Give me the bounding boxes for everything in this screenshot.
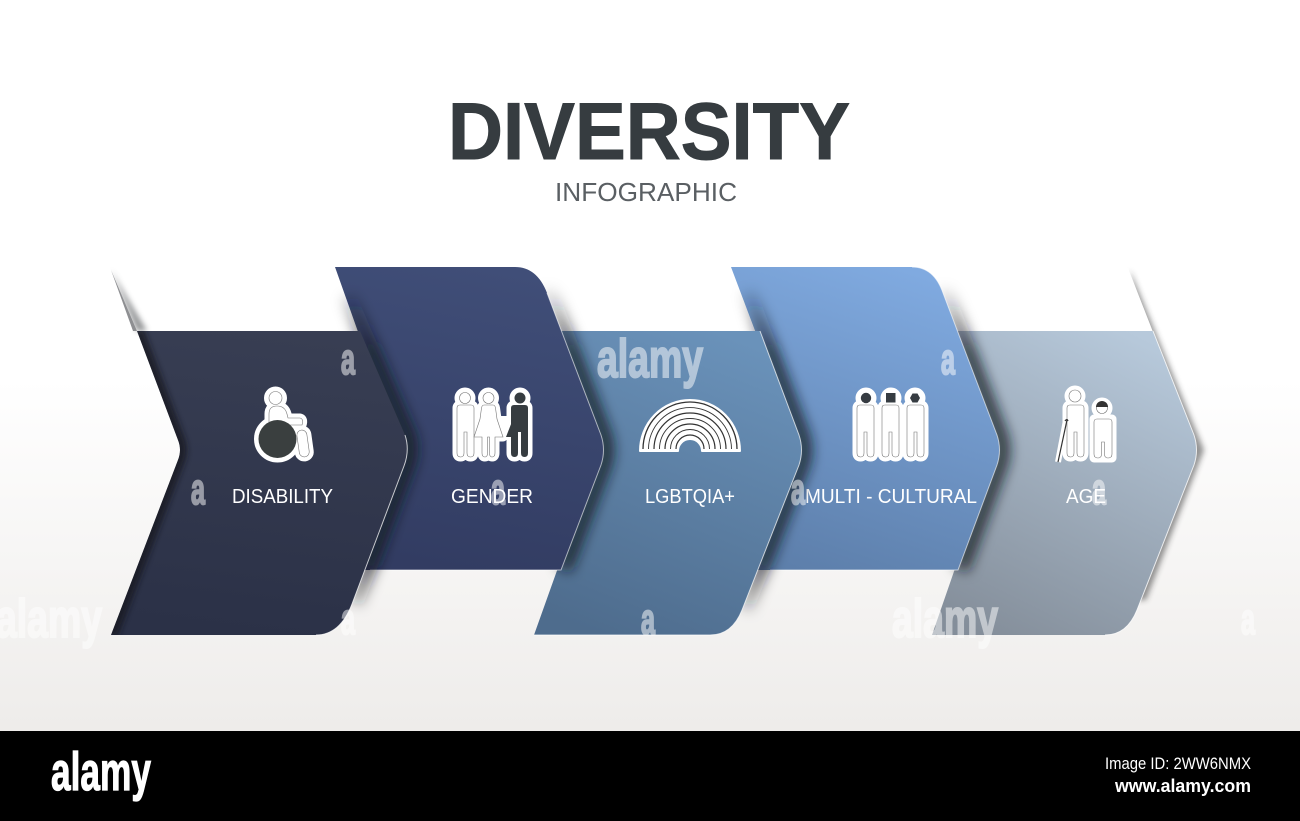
icon: age xyxy=(1058,390,1112,462)
icon: rainbow xyxy=(640,400,740,451)
footer bar xyxy=(0,731,1300,821)
label: multi-cultural: MULTI - CULTURAL xyxy=(805,486,977,508)
watermarks: a xyxy=(1092,465,1106,514)
image id: Image ID: 2WW6NMX xyxy=(1105,754,1251,773)
watermarks: alamy xyxy=(597,329,703,389)
watermarks: alamy xyxy=(892,589,998,649)
icon: wheelchair xyxy=(258,391,310,458)
label: lgbtqia+: LGBTQIA+ xyxy=(645,486,735,508)
panel: gender xyxy=(335,250,606,570)
website: www.alamy.com xyxy=(1114,776,1251,796)
watermarks: a xyxy=(791,465,805,514)
watermarks: a xyxy=(1241,595,1255,644)
watermarks: a xyxy=(491,465,505,514)
label: age: AGE xyxy=(1066,486,1106,508)
panel: age xyxy=(932,268,1204,635)
watermarks: a xyxy=(641,595,655,644)
label: disability: DISABILITY xyxy=(232,486,333,508)
panel: multi-cultural xyxy=(731,250,1002,570)
subtitle: INFOGRAPHIC xyxy=(555,177,737,207)
title: DIVERSITY xyxy=(448,87,850,177)
watermarks xyxy=(0,329,1255,649)
panel: disability xyxy=(100,268,410,635)
icon: multi-cultural people xyxy=(857,392,924,457)
watermarks: alamy xyxy=(0,589,102,649)
icon: gender people xyxy=(457,392,528,457)
watermarks: a xyxy=(341,335,355,384)
label: gender: GENDER xyxy=(451,486,533,508)
footer logo: alamy xyxy=(51,742,151,802)
watermarks: a xyxy=(341,595,355,644)
watermarks: a xyxy=(941,335,955,384)
watermarks: a xyxy=(191,465,205,514)
panel: lgbtqia+ xyxy=(534,290,804,635)
